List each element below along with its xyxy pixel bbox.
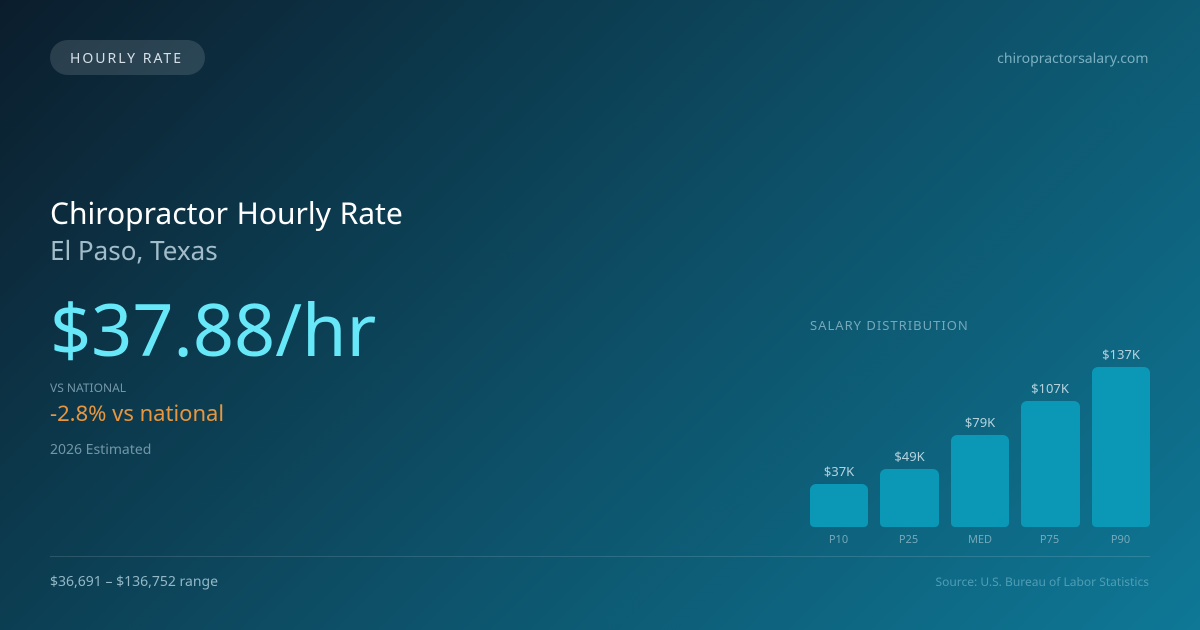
site name: chiropractorsalary.com xyxy=(997,49,1148,68)
vs national label: VS NATIONAL xyxy=(50,379,126,396)
title: Chiropractor Hourly Rate xyxy=(50,192,403,233)
main hourly figure: $37.88/hr xyxy=(50,280,376,378)
salary range: $36,691 – $136,752 range xyxy=(50,572,218,591)
bar P10 xyxy=(810,462,868,547)
bar P75: $107K xyxy=(1031,379,1069,397)
bar median xyxy=(951,413,1009,547)
bar P90: $137K xyxy=(1102,345,1140,363)
bar P10: P10 xyxy=(829,532,848,547)
chart: salary distribution xyxy=(810,316,1150,547)
bar P25: P25 xyxy=(899,532,918,547)
source note: Source: U.S. Bureau of Labor Statistics xyxy=(936,573,1149,590)
bar median: MED xyxy=(968,532,992,547)
bar P75 xyxy=(1021,379,1080,547)
location subtitle: El Paso, Texas xyxy=(50,232,218,268)
bar P10: $37K xyxy=(824,462,854,480)
badge label: HOURLY RATE xyxy=(70,49,183,68)
bar P75: P75 xyxy=(1040,532,1059,547)
estimate note: 2026 Estimated xyxy=(50,440,151,459)
bar median: $79K xyxy=(965,413,995,431)
bar P90: P90 xyxy=(1111,532,1130,547)
badge: hourly rate xyxy=(50,40,205,75)
bar P25: $49K xyxy=(894,447,925,465)
bar P25 xyxy=(880,447,939,547)
bar P90 xyxy=(1092,345,1150,547)
chart heading: SALARY DISTRIBUTION xyxy=(810,316,969,334)
vs national value: -2.8% vs national xyxy=(50,398,224,428)
